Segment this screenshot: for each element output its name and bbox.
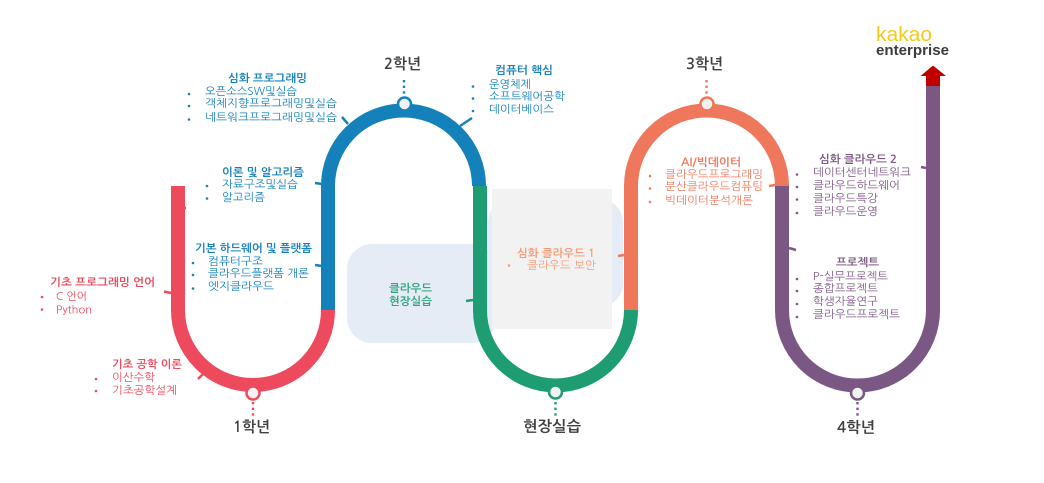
text block: basic hardware and platforms [192,242,313,292]
text block: basic programming languages: 기초 프로그래밍 언어 [50,276,155,288]
logo: kakao enterprise: kakao [876,24,932,46]
text block: AI and big data: 빅데이터분석개론 [665,194,754,206]
text block: projects: P-실무프로젝트 [813,270,889,282]
text block: basic engineering theory: 기초 공학 이론 [112,358,183,370]
node: year 2 [398,80,411,110]
text block: advanced programming: 네트워크프로그래밍및실습 [205,111,338,123]
text block: advanced programming: 심화 프로그래밍 [228,72,307,84]
text block: projects: 학생자율연구 [813,295,879,307]
text block: advanced cloud 2: 데이터센터네트워크 [813,166,912,178]
text block: advanced cloud 2 [796,153,912,217]
text block: basic hardware and platforms: 엣지클라우드 [208,280,275,292]
text block: theory and algorithms: 알고리즘 [222,191,266,203]
connector ticks [164,117,926,379]
text block: advanced cloud 2: 심화 클라우드 2 [819,153,897,165]
background panel: field practice [347,244,497,343]
text block: theory and algorithms [206,166,305,203]
text block: AI and big data [649,156,763,206]
text block: basic programming languages: Python [56,304,92,316]
text block: cloud field practice: 클라우드 [389,282,433,294]
year label: field practice: 현장실습 [523,418,581,434]
text block: advanced programming: 오픈소스SW및실습 [205,85,298,97]
text block: computer core: 컴퓨터 핵심 [495,64,553,76]
purple track: year 4 [782,86,933,386]
text block: basic engineering theory: 기초공학설계 [112,384,177,396]
text block: theory and algorithms: 자료구조및실습 [222,178,299,190]
text block: computer core: 운영체제 [489,78,531,90]
text block: cloud field practice: 현장실습 [389,295,433,307]
text block: basic hardware and platforms: 기본 하드웨어 및 플랫폼 [195,242,313,254]
node: year 3 [700,80,714,110]
text block: projects [796,256,901,320]
text block: basic engineering theory [95,358,183,396]
text block: advanced cloud 2: 클라우드특강 [813,192,879,204]
text block: basic hardware and platforms: 컴퓨터구조 [208,255,264,267]
text block: basic engineering theory: 이산수학 [112,371,156,383]
year label: 2: 2학년 [384,56,421,72]
text block: basic programming languages: C 언어 [56,290,87,302]
text block: basic hardware and platforms: 클라우드플랫폼 개론 [208,267,310,279]
text block: advanced programming: 객체지향프로그래밍및실습 [205,97,338,109]
logo: kakao enterprise [876,24,949,59]
node: year 4 [851,386,864,418]
node: year 1 [246,386,260,418]
year label: 4: 4학년 [837,420,875,436]
text block: cloud field practice [389,282,433,307]
text block: basic programming languages [41,276,155,316]
text block: projects: 종합프로젝트 [813,282,879,294]
green track: field practice [480,186,631,385]
blue track: year 2 [328,110,479,310]
year label: 3: 3학년 [686,56,723,72]
logo: kakao enterprise: enterprise [876,43,949,59]
text block: computer core: 데이터베이스 [489,103,555,115]
red track: year 1 [178,186,328,385]
text block: theory and algorithms: 이론 및 알고리즘 [222,166,305,178]
gray panel: advanced cloud 1 [492,189,612,329]
text block: projects: 클라우드프로젝트 [813,308,901,320]
text block: AI and big data: 분산클라우드컴퓨팅 [665,180,763,192]
text block: advanced cloud 2: 클라우드운영 [813,205,878,217]
text block: AI and big data: AI/빅데이터 [681,156,741,168]
text block: advanced cloud 1 [508,247,597,271]
text block: AI and big data: 클라우드프로그래밍 [665,168,763,180]
text block: projects: 프로젝트 [836,256,880,268]
orange track: year 3 [631,110,782,310]
text block: advanced cloud 1: 클라우드 보안 [527,259,597,271]
text block: advanced cloud 1: 심화 클라우드 1 [517,247,595,259]
text block: advanced cloud 2: 클라우드하드웨어 [813,179,900,191]
background panel: right tint [488,200,623,306]
text block: computer core [472,64,566,115]
text block: computer core: 소프트웨어공학 [489,90,566,102]
node: field practice [549,386,562,418]
arrow head [920,66,946,86]
text block: advanced programming [188,72,338,123]
year label: 1: 1학년 [233,419,270,435]
